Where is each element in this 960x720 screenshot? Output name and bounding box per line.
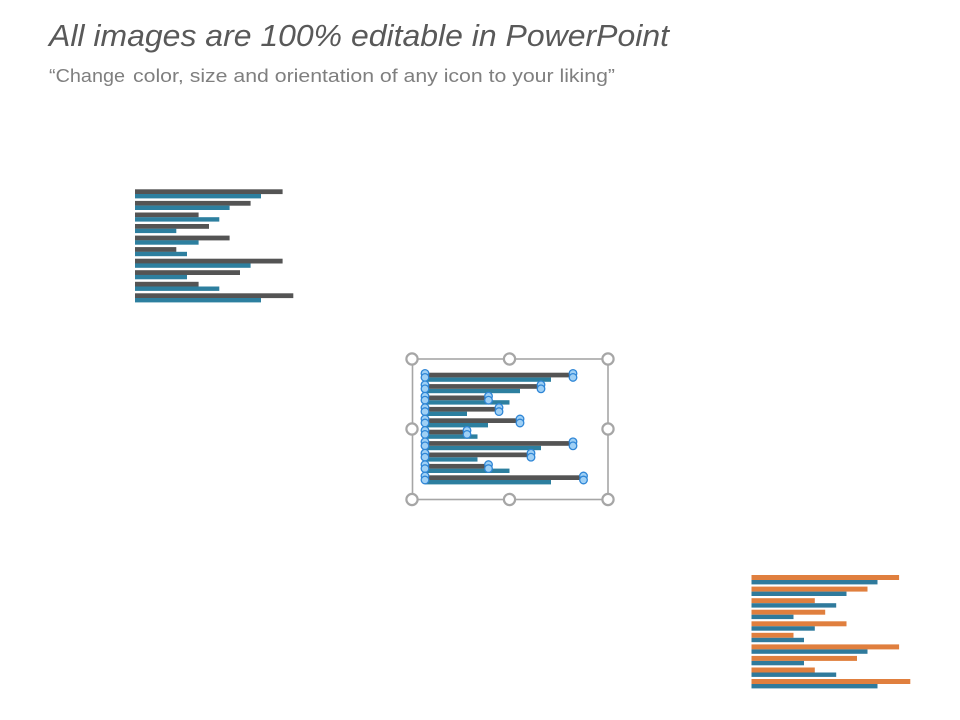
bar chart: gray and teal icon (135, 189, 293, 302)
subtitle: “Change (49, 65, 125, 86)
subtitle: color, size and orientation of any icon to your liking” (133, 65, 615, 86)
resize handles (406, 353, 614, 505)
bar chart: orange and blue icon (752, 575, 910, 688)
selected bar chart icon with edit handles (406, 353, 614, 505)
selection frame (412, 359, 608, 500)
title: All images are 100% editable in PowerPoint (47, 18, 670, 53)
point handles (421, 370, 587, 484)
